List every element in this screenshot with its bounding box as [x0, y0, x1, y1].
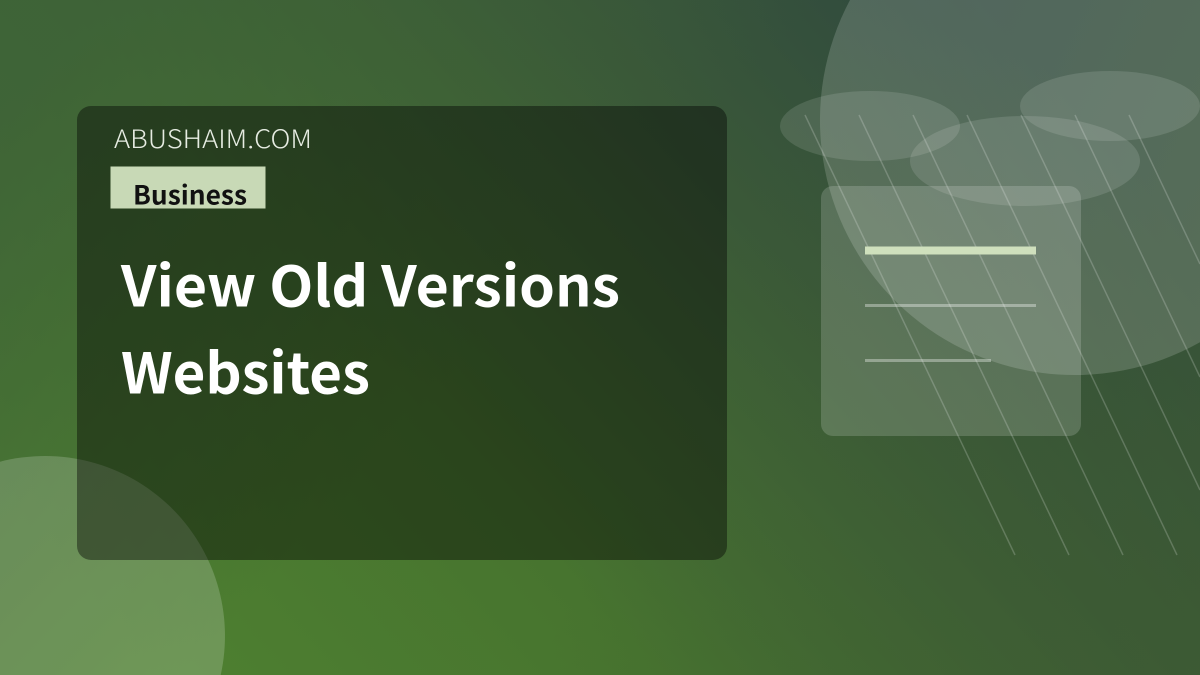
decorative circle: bottom left — [0, 456, 225, 675]
category tag: Business — [133, 176, 247, 212]
title: View Old Versions — [120, 242, 620, 324]
title: Websites — [121, 330, 370, 410]
panel: main title card — [77, 106, 727, 560]
category tag — [110, 166, 266, 212]
illustration: web page mockup with clouds — [780, 71, 1200, 555]
title — [120, 242, 620, 410]
cloud ellipses — [780, 71, 1200, 206]
site name: ABUSHAIM.COM — [114, 119, 312, 156]
text line 1 — [865, 304, 1036, 307]
diagonal rain lines — [805, 115, 1200, 555]
browser card — [821, 186, 1081, 436]
heading line — [865, 246, 1036, 254]
decorative circle: top right — [820, 0, 1200, 375]
text line 2 — [865, 359, 991, 362]
